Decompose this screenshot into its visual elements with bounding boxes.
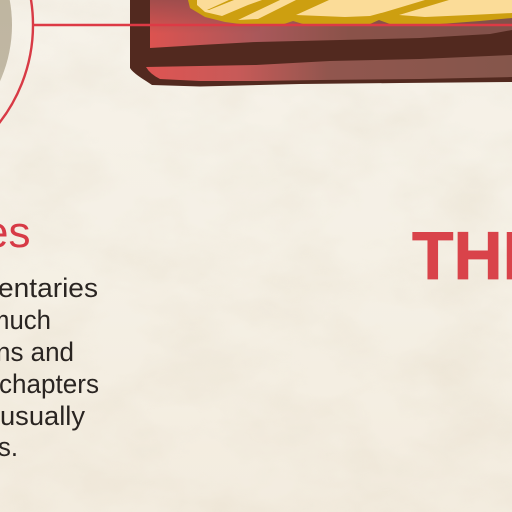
- tray upper face: [150, 0, 512, 48]
- pastry tray illustration: [130, 0, 512, 86]
- circle photo fill: [0, 0, 12, 163]
- pastry highlight slice 1: [197, 0, 262, 16]
- pastry highlight slice 3: [296, 0, 425, 17]
- body text block: chapters: [0, 369, 99, 399]
- connector line: [33, 24, 512, 26]
- pastry highlight slice 4: [399, 0, 512, 17]
- tray lower face: [146, 55, 512, 81]
- pastry streak: [207, 0, 234, 10]
- pastry gold crust: [188, 0, 512, 24]
- body text block: usually: [0, 401, 86, 431]
- tray outline: [130, 0, 512, 86]
- body text block: entaries: [0, 273, 98, 303]
- circular photo callout: [0, 0, 33, 184]
- pastry highlight slice 2: [238, 0, 296, 20]
- tray upper face shading: [150, 0, 260, 42]
- circle ring: [0, 0, 33, 184]
- body text block: [0, 273, 99, 462]
